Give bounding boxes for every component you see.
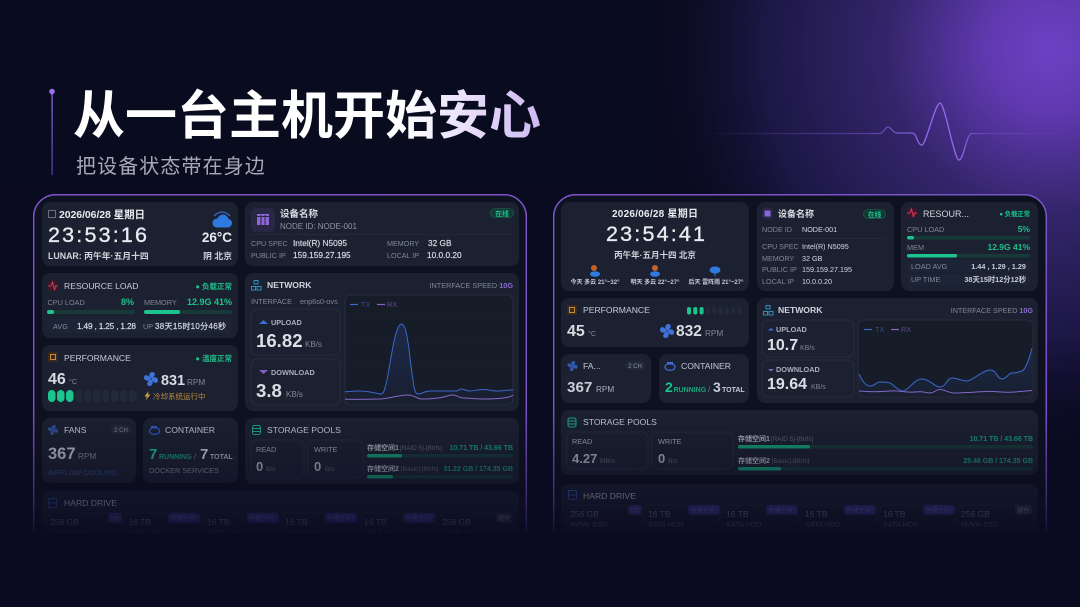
panel: performance bbox=[42, 345, 238, 411]
chart legend: RX bbox=[901, 325, 911, 334]
heading: STORAGE POOLS bbox=[267, 425, 341, 435]
storage pool 2: 存储空间2 bbox=[367, 464, 399, 473]
load average and uptime: UP bbox=[143, 322, 153, 331]
heading: STORAGE POOLS bbox=[583, 417, 657, 427]
drive cards: NVMe SSD bbox=[570, 520, 607, 529]
storage pool 1: 存储空间1 bbox=[738, 434, 770, 443]
memory: MEMORY bbox=[144, 298, 177, 307]
panel: clock and forecast bbox=[561, 202, 749, 291]
device specs: 10.0.0.20 bbox=[427, 250, 462, 260]
device name: 设备名称 bbox=[280, 208, 319, 220]
device specs: 32 GB bbox=[428, 238, 452, 248]
temperature: 26°C bbox=[202, 230, 232, 245]
forecast: today: 今天 多云 21°~32° bbox=[570, 278, 620, 286]
heading: HARD DRIVE bbox=[64, 498, 117, 508]
upload stat bbox=[762, 320, 854, 357]
online badge: 在线 bbox=[868, 210, 882, 219]
drive cards: SATA HDD bbox=[207, 528, 242, 537]
device specs: Intel(R) N5095 bbox=[293, 238, 347, 248]
cpu load bbox=[907, 224, 1030, 240]
chart legend: TX bbox=[875, 325, 884, 334]
clock time: 23:53:16 bbox=[48, 223, 147, 247]
memory: 12.9G 41% bbox=[987, 242, 1030, 252]
read stat bbox=[567, 432, 648, 469]
drive cards: 缓存 bbox=[498, 514, 510, 522]
status: ● 负载正常 bbox=[999, 209, 1030, 218]
device specs: CPU SPEC bbox=[251, 239, 288, 248]
container counts: 7 bbox=[200, 446, 208, 463]
memory: 12.9G 41% bbox=[187, 297, 232, 307]
heading: PERFORMANCE bbox=[64, 353, 131, 363]
uptime bbox=[907, 274, 1030, 285]
panel: storage pools bbox=[245, 418, 519, 484]
read stat: 0 bbox=[256, 459, 263, 474]
storage pool 1 bbox=[738, 434, 1033, 448]
storage pool 1: [RAID 5]-[Btrfs] bbox=[400, 445, 443, 452]
channel badge: 2 CH bbox=[628, 364, 642, 370]
icon: storage bbox=[252, 426, 260, 434]
uptime: 38天15时12分12秒 bbox=[964, 275, 1027, 284]
device name: 设备名称 bbox=[778, 208, 814, 219]
drive cards: SATA HDD bbox=[726, 520, 761, 529]
heading: PERFORMANCE bbox=[583, 305, 650, 315]
container counts bbox=[665, 379, 745, 395]
icon: network bbox=[764, 306, 773, 315]
write stat: WRITE bbox=[314, 445, 338, 454]
drive cards bbox=[47, 513, 514, 553]
panel: hard drive bbox=[561, 484, 1038, 560]
drive cards: 缓存 bbox=[1017, 506, 1030, 514]
drive cards bbox=[567, 505, 1033, 545]
fan speed bbox=[676, 323, 723, 340]
cpu load: CPU LOAD bbox=[48, 298, 85, 307]
icon: pulse bbox=[907, 208, 917, 218]
heartbeat line bbox=[700, 103, 1070, 160]
icon: fan bbox=[660, 324, 674, 338]
read stat bbox=[251, 440, 304, 478]
forecast: tomorrow: 明天 多云 22°~27° bbox=[630, 278, 680, 286]
status: ● 负载正常 bbox=[195, 281, 232, 291]
panel: network bbox=[245, 273, 519, 411]
memory bbox=[907, 242, 1030, 258]
chart legend: RX bbox=[387, 300, 397, 309]
channel badge: 2 CH bbox=[114, 428, 128, 434]
heading: RESOURCE LOAD bbox=[64, 281, 138, 291]
drive cards: OS bbox=[631, 508, 639, 514]
device specs: 32 GB bbox=[802, 254, 823, 263]
upload stat bbox=[251, 309, 340, 355]
icon: container bbox=[665, 362, 675, 370]
drive cards: NVMe SSD bbox=[50, 528, 87, 537]
panel: device bbox=[757, 202, 894, 291]
storage pool 2: 25.46 GB / 174.35 GB bbox=[963, 458, 1033, 465]
node id: NODE ID bbox=[762, 225, 792, 234]
drive cards: 16 TB bbox=[364, 517, 387, 527]
load average and uptime bbox=[47, 319, 232, 333]
lunar date: LUNAR: 丙午年·五月十四 bbox=[48, 250, 149, 261]
load average: 1.44 , 1.29 , 1.29 bbox=[971, 262, 1026, 271]
forecast: today bbox=[570, 265, 620, 286]
fan rpm: RPM bbox=[78, 452, 96, 461]
load average and uptime: 1.49 , 1.25 , 1.28 bbox=[77, 321, 136, 331]
online badge: 在线 bbox=[495, 209, 509, 218]
heading: RESOUR... bbox=[923, 209, 969, 219]
heading: NETWORK bbox=[267, 280, 312, 290]
interface speed: INTERFACE SPEED 10G bbox=[951, 306, 1033, 315]
forecast: tomorrow bbox=[630, 265, 680, 286]
container counts: 2 bbox=[665, 379, 673, 395]
icon: fan bbox=[144, 372, 158, 386]
chart legend bbox=[864, 325, 911, 334]
panel: fans bbox=[561, 354, 651, 403]
temperature pills bbox=[48, 390, 136, 402]
drive cards: SATA HDD bbox=[285, 528, 320, 537]
chart legend bbox=[350, 300, 397, 309]
container counts: 7 bbox=[149, 446, 157, 463]
node id: NODE-001 bbox=[802, 225, 837, 234]
icon: fan bbox=[568, 361, 578, 371]
download stat: KB/s bbox=[811, 384, 826, 391]
drive cards: SATA HDD bbox=[364, 528, 399, 537]
icon: drive bbox=[48, 498, 56, 508]
icon: chip bbox=[567, 305, 577, 315]
lunar date and city: 丙午年·五月十四 北京 bbox=[614, 250, 696, 260]
icon: drive bbox=[568, 490, 576, 500]
drive cards: 存储空间1 bbox=[170, 514, 198, 522]
cpu load: 5% bbox=[1018, 224, 1030, 234]
read stat: READ bbox=[572, 437, 592, 446]
drive cards: SATA HDD bbox=[805, 520, 840, 529]
device specs: LOCAL IP bbox=[762, 277, 794, 286]
heading: CONTAINER bbox=[165, 425, 215, 435]
device specs bbox=[762, 242, 852, 286]
write stat: B/s bbox=[668, 458, 678, 465]
drive cards: 存储空间1 bbox=[690, 506, 718, 514]
icon: weather cloud bbox=[212, 212, 232, 228]
download stat: DOWNLOAD bbox=[271, 368, 315, 377]
fan speed bbox=[161, 373, 205, 389]
drive cards: 16 TB bbox=[128, 517, 151, 527]
clock time: 23:54:41 bbox=[606, 222, 705, 246]
load average bbox=[907, 260, 1030, 272]
subtitle: 把设备状态带在身边 bbox=[76, 155, 266, 178]
fan speed: RPM bbox=[705, 329, 723, 338]
interface name: enp6s0-ovs bbox=[300, 297, 338, 306]
drive cards: 256 GB bbox=[442, 517, 471, 527]
write stat: 0 bbox=[314, 459, 321, 474]
temperature: °C bbox=[69, 377, 77, 386]
download stat bbox=[762, 360, 854, 397]
drive cards: 存储空间1 bbox=[925, 506, 953, 514]
node id bbox=[762, 225, 837, 234]
icon: network bbox=[252, 280, 261, 290]
upload stat: 16.82 bbox=[256, 330, 303, 351]
drive cards: 存储空间1 bbox=[846, 506, 874, 514]
drive cards: 16 TB bbox=[883, 509, 906, 519]
device specs: MEMORY bbox=[387, 239, 419, 248]
device specs: LOCAL IP bbox=[387, 251, 419, 260]
write stat bbox=[652, 432, 733, 469]
drive cards: 存储空间1 bbox=[249, 514, 277, 522]
panel: network bbox=[757, 298, 1038, 403]
drive cards: 256 GB bbox=[961, 509, 990, 519]
device specs: PUBLIC IP bbox=[762, 265, 797, 274]
fan speed: 831 bbox=[161, 373, 185, 389]
weather and city: 阴 北京 bbox=[203, 250, 232, 261]
panel: resource load bbox=[42, 273, 238, 338]
memory bbox=[144, 297, 232, 314]
drive cards: NVMe SSD bbox=[442, 528, 479, 537]
load average: LOAD AVG bbox=[911, 262, 948, 271]
load average and uptime: 38天15时10分46秒 bbox=[155, 321, 226, 331]
interface speed: INTERFACE SPEED 10G bbox=[429, 281, 513, 290]
temperature: 46 bbox=[48, 371, 66, 388]
container counts: / bbox=[708, 385, 711, 394]
storage pool 2: [Basic]-[Btrfs] bbox=[401, 466, 439, 473]
panel: container bbox=[659, 354, 749, 403]
icon: container bbox=[150, 426, 160, 434]
temperature: 45 bbox=[567, 323, 585, 340]
fan rpm: RPM bbox=[596, 385, 614, 394]
storage pool 2: 31.22 GB / 174.35 GB bbox=[443, 466, 513, 473]
drive cards: 存储空间1 bbox=[327, 514, 355, 522]
title accent line bbox=[49, 89, 55, 175]
write stat: B/s bbox=[325, 466, 335, 473]
download stat: 19.64 bbox=[767, 376, 807, 393]
upload stat: KB/s bbox=[800, 345, 815, 352]
fan rpm: 367 bbox=[567, 379, 592, 396]
date: 2026/06/28 星期日 bbox=[612, 207, 698, 220]
dashboard frame: right bbox=[554, 195, 1046, 595]
panel: resource load bbox=[901, 202, 1038, 291]
caption: DOCKER SERVICES bbox=[149, 466, 219, 475]
device specs: PUBLIC IP bbox=[251, 251, 286, 260]
temperature bbox=[48, 371, 77, 388]
uptime: UP TIME bbox=[911, 275, 940, 284]
heading: NETWORK bbox=[778, 305, 823, 315]
date: 2026/06/28 星期日 bbox=[59, 208, 145, 221]
write stat bbox=[308, 440, 363, 478]
heading: HARD DRIVE bbox=[583, 491, 636, 501]
storage pool 1: 10.71 TB / 43.66 TB bbox=[970, 436, 1033, 443]
storage pool 2: 存储空间2 bbox=[738, 456, 770, 465]
cpu load bbox=[47, 297, 135, 314]
drive cards: SATA HDD bbox=[883, 520, 918, 529]
interface name bbox=[251, 297, 338, 306]
icon: lightning bbox=[144, 391, 150, 400]
icon: server bbox=[251, 208, 275, 232]
device specs bbox=[251, 238, 462, 260]
drive cards: 256 GB bbox=[570, 509, 599, 519]
drive cards: 16 TB bbox=[648, 509, 671, 519]
drive cards: SATA HDD bbox=[648, 520, 683, 529]
panel: performance bbox=[561, 298, 749, 347]
memory: MEM bbox=[907, 243, 924, 252]
read stat: MB/s bbox=[600, 458, 616, 465]
drive cards: 存储空间1 bbox=[405, 514, 433, 522]
container counts: RUNNING bbox=[674, 387, 707, 394]
device specs: 10.0.0.20 bbox=[802, 277, 832, 286]
status: ● 温度正常 bbox=[195, 353, 232, 363]
drive cards: 16 TB bbox=[285, 517, 308, 527]
device specs: CPU SPEC bbox=[762, 242, 799, 251]
storage pool 1: [RAID 5]-[Btrfs] bbox=[771, 436, 814, 443]
cpu load: CPU LOAD bbox=[907, 225, 944, 234]
drive cards: NVMe SSD bbox=[961, 520, 998, 529]
device specs: 159.159.27.195 bbox=[802, 265, 852, 274]
temperature: °C bbox=[588, 329, 596, 338]
cpu load: 8% bbox=[121, 297, 134, 307]
device specs: MEMORY bbox=[762, 254, 794, 263]
panel: storage pools bbox=[561, 410, 1038, 475]
download stat: 3.8 bbox=[256, 380, 282, 401]
write stat: 0 bbox=[658, 451, 665, 466]
panel: container bbox=[143, 418, 238, 483]
heading: CONTAINER bbox=[681, 361, 731, 371]
drive cards: 16 TB bbox=[805, 509, 828, 519]
temperature bbox=[567, 323, 596, 340]
cooling status: 冷却系统运行中 bbox=[153, 391, 206, 401]
download stat bbox=[251, 359, 340, 405]
panel: hard drive bbox=[42, 491, 519, 561]
fan rpm: 367 bbox=[48, 445, 76, 463]
device specs: 159.159.27.195 bbox=[293, 250, 351, 260]
heading: FANS bbox=[64, 425, 87, 435]
icon: pulse bbox=[48, 281, 58, 291]
read stat: READ bbox=[256, 445, 276, 454]
fan speed: RPM bbox=[187, 378, 205, 387]
storage pool 1 bbox=[367, 443, 513, 458]
icon: chip bbox=[48, 352, 58, 362]
container counts: TOTAL bbox=[210, 454, 233, 461]
caption: AIRFLOW COOLING bbox=[48, 468, 117, 477]
icon: calendar bbox=[48, 210, 56, 218]
network chart bbox=[345, 295, 513, 405]
panel: clock and weather bbox=[42, 202, 238, 266]
forecast: day after bbox=[688, 266, 744, 286]
load average and uptime: AVG bbox=[53, 322, 68, 331]
read stat: 4.27 bbox=[572, 451, 597, 466]
write stat: WRITE bbox=[658, 437, 682, 446]
download stat: DOWNLOAD bbox=[776, 365, 820, 374]
container counts: 3 bbox=[713, 379, 721, 395]
online badge bbox=[490, 208, 514, 218]
upload stat: 10.7 bbox=[767, 337, 798, 354]
temperature pills bbox=[687, 307, 741, 314]
download stat: KB/s bbox=[286, 390, 303, 399]
title: 从一台主机开始安心 bbox=[73, 88, 541, 146]
fan rpm bbox=[48, 445, 96, 463]
read stat: B/s bbox=[266, 466, 276, 473]
container counts: TOTAL bbox=[722, 387, 745, 394]
heading: FA... bbox=[583, 361, 601, 371]
panel: fans bbox=[42, 418, 136, 483]
chart legend: TX bbox=[361, 300, 370, 309]
upload stat: UPLOAD bbox=[271, 318, 302, 327]
storage pool 2 bbox=[738, 456, 1033, 470]
network chart bbox=[858, 320, 1033, 397]
storage pool 2 bbox=[367, 464, 513, 478]
drive cards: 存储空间1 bbox=[768, 506, 796, 514]
drive cards: SATA HDD bbox=[128, 528, 164, 537]
icon: server bbox=[762, 208, 773, 219]
container counts: / bbox=[194, 452, 197, 461]
device specs: Intel(R) N5095 bbox=[802, 242, 849, 251]
drive cards: 16 TB bbox=[207, 517, 230, 527]
fan speed: 832 bbox=[676, 323, 702, 340]
panel: device bbox=[245, 202, 519, 266]
interface name: INTERFACE bbox=[251, 297, 292, 306]
drive cards: OS bbox=[111, 516, 119, 522]
container counts: RUNNING bbox=[159, 454, 192, 461]
drive cards: 16 TB bbox=[726, 509, 749, 519]
dashboard frame: left bbox=[34, 195, 526, 595]
storage pool 1: 存储空间1 bbox=[367, 443, 399, 452]
forecast: day after: 后天 雷阵雨 21°~27° bbox=[688, 278, 744, 286]
node id: NODE ID: NODE-001 bbox=[280, 222, 357, 231]
upload stat: KB/s bbox=[305, 340, 322, 349]
storage pool 2: [Basic]-[Btrfs] bbox=[772, 458, 810, 465]
drive cards: 256 GB bbox=[50, 517, 79, 527]
icon: fan bbox=[48, 425, 58, 435]
container counts bbox=[149, 446, 233, 463]
storage pool 1: 10.71 TB / 43.66 TB bbox=[450, 445, 513, 452]
upload stat: UPLOAD bbox=[776, 325, 807, 334]
icon: storage bbox=[568, 418, 576, 427]
fan rpm bbox=[567, 379, 614, 396]
